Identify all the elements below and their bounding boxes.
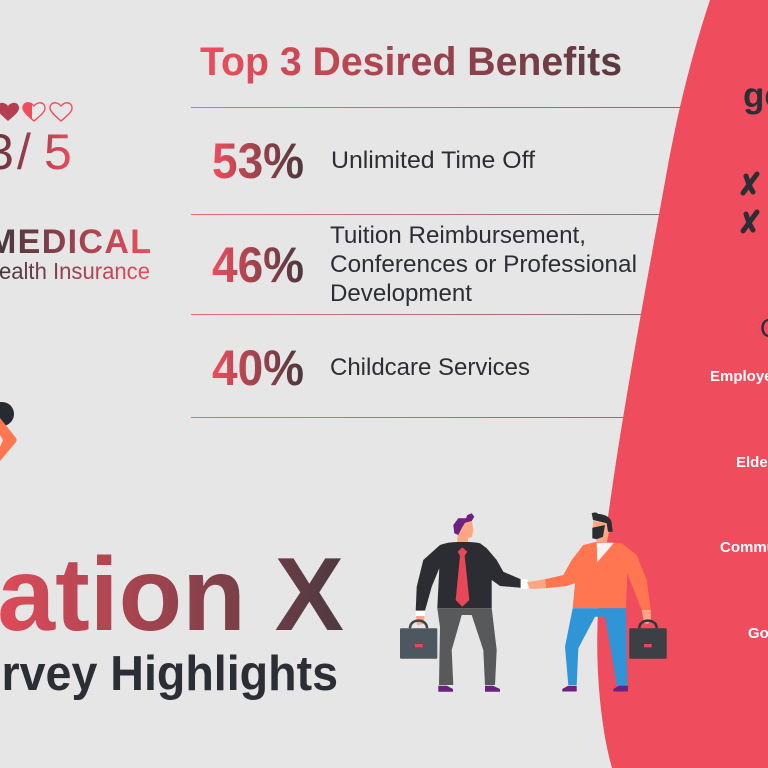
heading: top 3 desired benefits: Top 3 Desired Benefits: [200, 40, 622, 84]
benefit row: 40%: Childcare Services: [330, 354, 530, 381]
benefit row: 46%: Development: [330, 280, 472, 307]
red curved panel: [597, 0, 768, 768]
benefit row: 40%: [212, 340, 530, 396]
icon: heart rating: [0, 103, 72, 121]
figure: bearded man: [527, 512, 667, 692]
rating score: /: [17, 124, 31, 180]
icon: partial person at left edge: [0, 402, 16, 461]
benefit row: 46%: 46%: [212, 237, 304, 293]
rating score: 5: [44, 124, 72, 180]
benefit row: 53%: 53%: [212, 133, 304, 189]
figure: businessman: [400, 513, 528, 692]
icon: cross mark: [743, 174, 757, 193]
benefit row: 46%: [212, 222, 637, 307]
benefit row: 53%: Unlimited Time Off: [331, 147, 535, 174]
divider lines: [191, 107, 680, 418]
benefit row: 53%: [212, 133, 535, 189]
illustration: handshake: [400, 512, 667, 692]
benefit row: 46%: Conferences or Professional: [330, 251, 637, 278]
icon: cross mark: [743, 212, 757, 231]
benefit row: 40%: 40%: [212, 340, 304, 396]
benefit row: 46%: Tuition Reimbursement,: [330, 222, 586, 249]
